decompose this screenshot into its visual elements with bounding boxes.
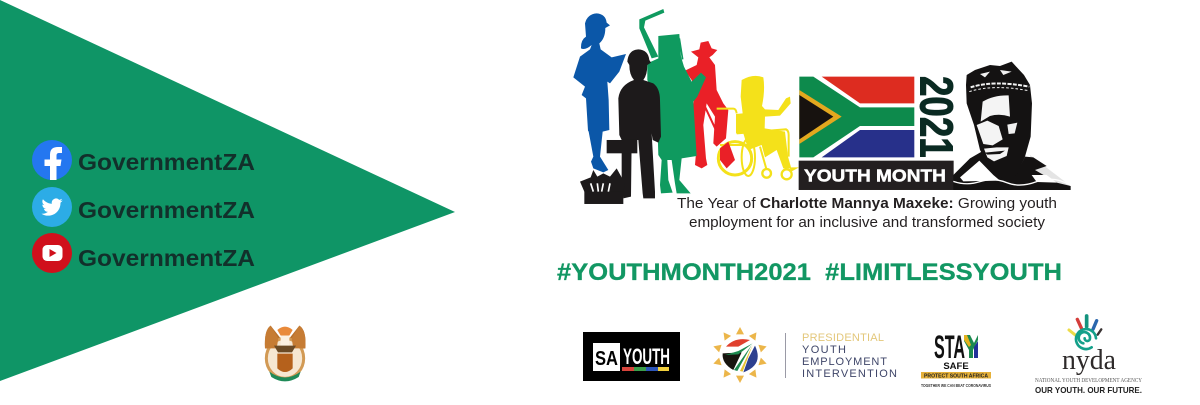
hashtags: #YOUTHMONTH2021 #LIMITLESSYOUTH (557, 259, 1062, 286)
youth month banner: YOUTH MONTH (804, 165, 946, 185)
logo: presidential youth employment intervention: EMPLOYMENT (802, 356, 887, 368)
logo: stay safe: SAFE (943, 361, 969, 372)
social media handles (32, 140, 255, 273)
figure: yellow wheelchair user (717, 76, 799, 179)
icon: coat of arms (265, 326, 306, 381)
youth month banner (799, 161, 954, 190)
logo: presidential youth employment intervention: PRESIDENTIAL (802, 332, 884, 344)
logo: nyda (1035, 316, 1143, 395)
figure: black worker (580, 49, 661, 204)
icon: hand spiral (1069, 316, 1101, 349)
logo: stay safe: TOGETHER WE CAN BEAT CORONAVIRUS (921, 383, 991, 388)
figure: red worker (685, 41, 728, 168)
youtube row (32, 233, 255, 273)
figure: green graduate (639, 9, 706, 193)
logo: sa youth: YOUTH (623, 344, 670, 369)
logo: youth month silhouettes (573, 9, 728, 204)
subtitle text (677, 196, 1057, 231)
figure: red boot (720, 142, 735, 168)
icon: sun emblem (712, 327, 768, 383)
year 2021: 2021 (910, 76, 962, 158)
logo: flag, year and banner (799, 76, 962, 190)
panel: green triangle (0, 0, 455, 381)
logo: nyda: OUR YOUTH. OUR FUTURE. (1035, 385, 1142, 395)
subtitle text: The Year of Charlotte Mannya Maxeke: Growing youth (677, 196, 1057, 212)
logo: nyda: nyda (1062, 344, 1116, 376)
figure: blue woman (573, 13, 626, 172)
portrait of charlotte maxeke (953, 62, 1071, 190)
logo: sa youth (583, 332, 680, 381)
logo: presidential youth employment intervention: INTERVENTION (802, 368, 897, 380)
south african flag (799, 77, 914, 157)
twitter row (32, 187, 255, 227)
logo: presidential youth employment intervention: YOUTH (802, 344, 846, 356)
youtube handle: GovernmentZA (78, 245, 255, 271)
logo: stay safe: STA (934, 329, 965, 365)
icon: twitter (32, 187, 72, 227)
subtitle text: employment for an inclusive and transformed society (689, 215, 1046, 231)
logo: stay safe (921, 329, 991, 388)
icon: facebook (32, 140, 72, 180)
flag letter y (964, 335, 978, 358)
icon: youtube (32, 233, 72, 273)
logo: stay safe: PROTECT SOUTH AFRICA (924, 374, 988, 380)
logo: nyda: NATIONAL YOUTH DEVELOPMENT AGENCY (1035, 378, 1143, 384)
twitter handle: GovernmentZA (78, 197, 255, 223)
facebook handle: GovernmentZA (78, 149, 255, 175)
logo: presidential youth employment intervention (712, 327, 897, 383)
logo: sa youth: SA (595, 348, 618, 370)
facebook row (32, 140, 255, 180)
